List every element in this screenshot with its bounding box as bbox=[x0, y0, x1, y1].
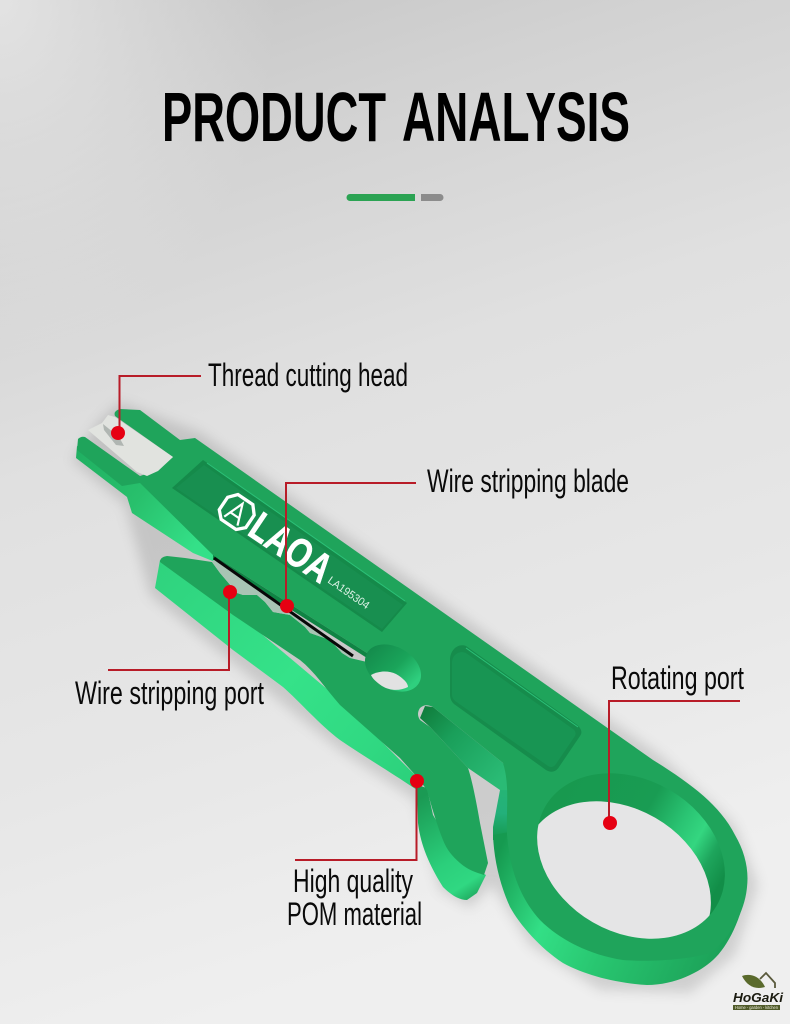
title: ANALYSIS bbox=[402, 78, 630, 156]
lower rectangular recess bbox=[450, 645, 581, 772]
LAOA logo bbox=[215, 491, 371, 612]
callout: high quality POM material: High quality bbox=[293, 863, 413, 899]
ring inner wall bbox=[507, 740, 755, 972]
ring see-through opening bbox=[537, 801, 711, 939]
callout: high quality POM material: POM material bbox=[287, 896, 422, 932]
callout: wire stripping port bbox=[75, 585, 264, 711]
product: wire stripping tool bbox=[72, 402, 758, 1000]
long slot inner wall bbox=[420, 706, 507, 790]
callout: thread cutting head bbox=[111, 357, 408, 440]
logo hexagon icon bbox=[215, 491, 259, 533]
tool shadow bbox=[72, 402, 758, 993]
cutting head blade notch bbox=[103, 424, 124, 446]
lever side face bbox=[155, 560, 420, 790]
hook side face bbox=[417, 785, 486, 900]
round hole bbox=[357, 635, 429, 701]
callout: rotating port: Rotating port bbox=[611, 660, 744, 696]
brand logo: HoGaKi bbox=[733, 973, 784, 1010]
callout: wire stripping port: Wire stripping port bbox=[75, 675, 264, 711]
cutting head silver blade bbox=[88, 415, 173, 476]
tool top face bbox=[77, 409, 748, 961]
callout: wire stripping blade: Wire stripping blade bbox=[427, 463, 629, 499]
logo icon: leaf and house bbox=[742, 973, 775, 988]
ring side face bbox=[493, 830, 747, 985]
title accent bar bbox=[347, 194, 444, 201]
logo tagline: Home - garden - kitchen bbox=[735, 1005, 778, 1010]
logo wordmark: LAOA bbox=[241, 503, 341, 592]
head and body side face bbox=[76, 446, 232, 562]
model number: LA195304 bbox=[325, 575, 371, 612]
callout: wire stripping blade bbox=[280, 463, 629, 613]
logo wordmark: HoGaKi bbox=[733, 991, 784, 1005]
large label recess bbox=[172, 460, 407, 632]
stripping gap: blade and black slit bbox=[212, 555, 367, 658]
callout: rotating port bbox=[603, 660, 744, 830]
title: PRODUCT bbox=[162, 78, 386, 156]
callout: high quality POM material bbox=[287, 774, 424, 932]
callout: thread cutting head: Thread cutting head bbox=[208, 357, 408, 393]
ring left strip bbox=[493, 765, 510, 840]
